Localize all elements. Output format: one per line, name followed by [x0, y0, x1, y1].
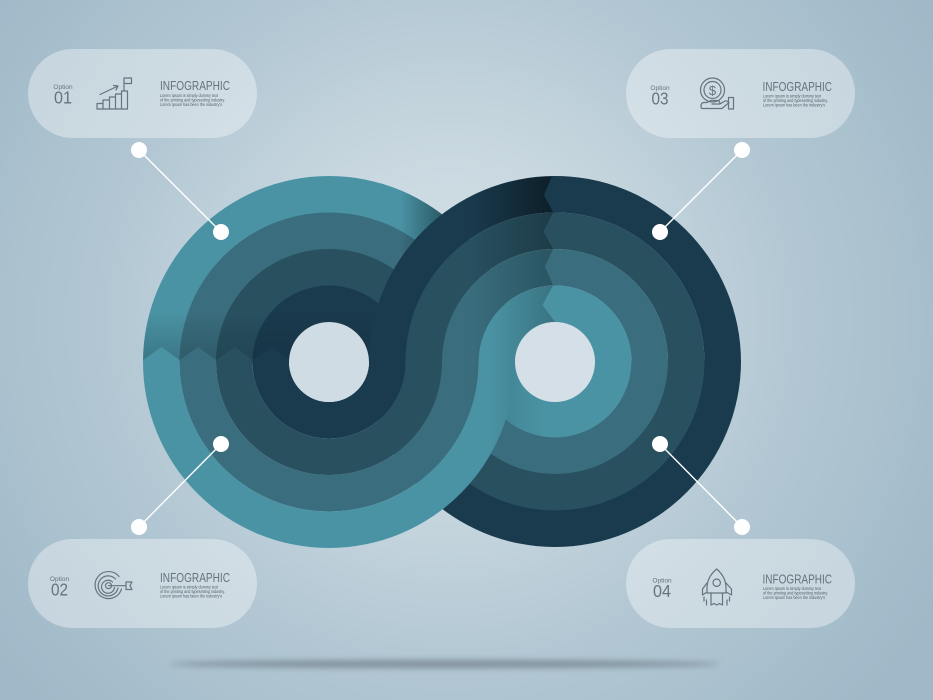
- option 04 body text: [763, 586, 828, 601]
- option 02 heading: INFOGRAPHIC: [160, 571, 230, 585]
- right circle hole: [515, 322, 595, 402]
- option 03 body text: Lorem Ipsum has been the industry's: [763, 102, 825, 108]
- option 02 number: 02: [51, 580, 68, 600]
- icon: growth chart: [97, 78, 132, 109]
- panel: option 02: [28, 539, 257, 628]
- option 02 label: Option: [50, 576, 69, 583]
- option 04 body text: of the printing and typesetting industry.: [763, 590, 828, 596]
- S ribbon crossing: [143, 176, 555, 548]
- icon: coin and hand: [700, 78, 734, 109]
- option 03 body text: Lorem Ipsum is simply dummy text: [763, 94, 822, 100]
- option 02 body text: of the printing and typesetting industry.: [160, 589, 225, 595]
- option 03 body text: [763, 94, 828, 108]
- connector 03: [652, 142, 750, 240]
- icon: dollar sign: $: [709, 83, 717, 98]
- option 01 body text: Lorem Ipsum has been the industry's: [160, 102, 222, 108]
- panel: option 03: [626, 49, 855, 138]
- panel: option 01: [28, 49, 257, 138]
- icon: target: [95, 572, 132, 599]
- connector 01: [131, 142, 229, 240]
- option 01 number: 01: [54, 88, 72, 108]
- right circle upper rings: [542, 176, 741, 362]
- left circle upper rings: [143, 176, 515, 362]
- option 01 body text: Lorem Ipsum is simply dummy text: [160, 93, 219, 99]
- option 03 body text: of the printing and typesetting industry.: [763, 98, 828, 104]
- option 02 body text: Lorem Ipsum is simply dummy text: [160, 584, 219, 590]
- right circle lower rings: [369, 361, 741, 547]
- option 04 body text: Lorem Ipsum has been the industry's: [763, 595, 825, 601]
- infinity loop diagram: [143, 176, 741, 548]
- connector 04: [652, 436, 750, 535]
- left circle hole: [289, 322, 369, 402]
- option 03 heading: INFOGRAPHIC: [762, 80, 832, 94]
- option 04 body text: Lorem Ipsum is simply dummy text: [763, 586, 822, 592]
- option 01 body text: of the printing and typesetting industry.: [160, 98, 225, 104]
- connector 02: [131, 436, 229, 535]
- option 04 label: Option: [652, 578, 672, 584]
- option 04 number: 04: [653, 581, 671, 601]
- option 04 heading: INFOGRAPHIC: [762, 572, 832, 586]
- option 03 label: Option: [650, 85, 670, 92]
- option 02 body text: Lorem Ipsum has been the industry's: [160, 594, 222, 600]
- icon: rocket: [702, 569, 732, 605]
- option 03 number: 03: [652, 88, 668, 108]
- panel: option 04: [626, 539, 855, 628]
- option 02 body text: [160, 584, 225, 600]
- floor shadow: [170, 660, 720, 668]
- option 01 heading: INFOGRAPHIC: [160, 79, 230, 93]
- option 01 body text: [160, 93, 225, 108]
- option 01 label: Option: [53, 84, 73, 91]
